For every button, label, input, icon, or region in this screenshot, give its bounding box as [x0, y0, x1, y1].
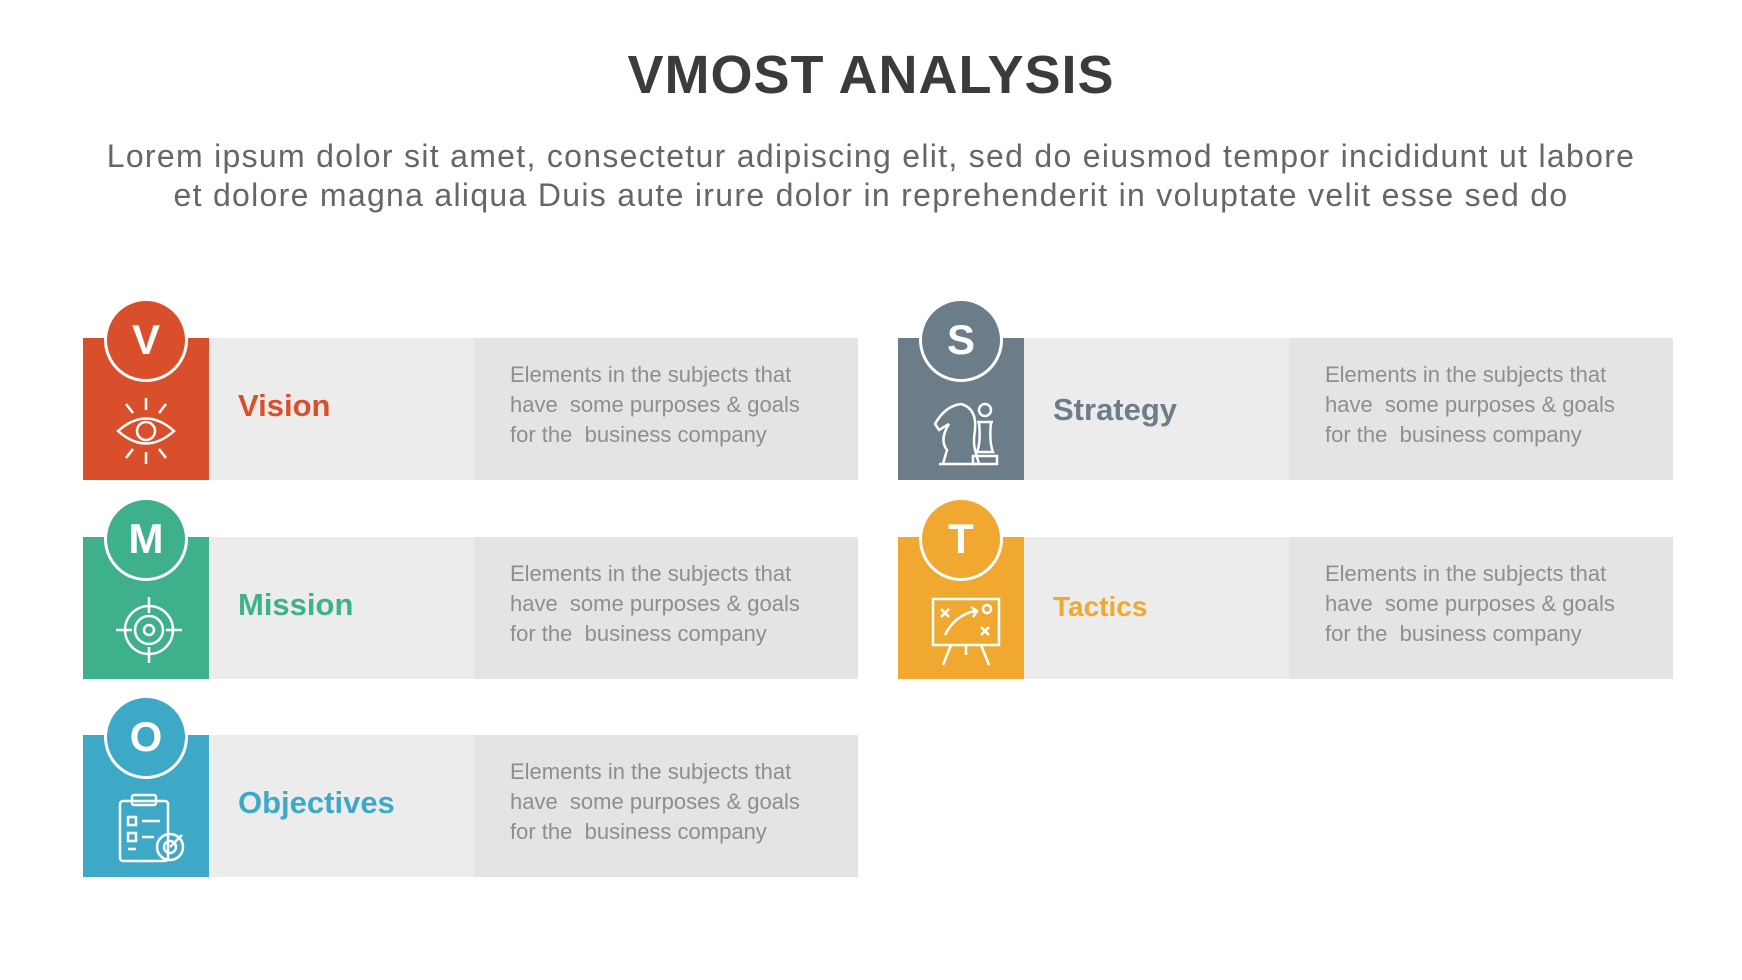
circle O: O — [130, 713, 162, 760]
circle V: V — [132, 316, 160, 363]
icon: chess pieces — [934, 402, 998, 466]
panel: strategy — [898, 338, 1673, 480]
subtitle: Lorem ipsum dolor sit amet, consectetur adipiscing elit, sed do eiusmod tempor incididunt ut labore — [107, 138, 1635, 174]
circle S — [919, 298, 1003, 382]
label: Tactics — [1053, 591, 1147, 622]
title: VMOST ANALYSIS — [627, 45, 1115, 105]
description: have some purposes & goals — [510, 789, 800, 814]
description: have some purposes & goals — [1325, 392, 1615, 417]
panel: tactics — [898, 537, 1673, 679]
description — [510, 362, 800, 447]
circle T — [919, 497, 1003, 581]
circle M — [104, 497, 188, 581]
label: Mission — [238, 587, 353, 622]
circle M: M — [128, 515, 164, 562]
label: Vision — [238, 388, 330, 423]
description: have some purposes & goals — [1325, 591, 1615, 616]
description: Elements in the subjects that — [510, 362, 791, 387]
circle T: T — [948, 515, 974, 562]
description: Elements in the subjects that — [510, 561, 791, 586]
icon: board — [932, 598, 1000, 666]
circle O — [104, 695, 188, 779]
subtitle — [107, 138, 1635, 213]
description: for the business company — [510, 819, 767, 844]
description — [1325, 362, 1615, 447]
description — [510, 759, 800, 844]
label: Strategy — [1053, 392, 1177, 427]
panel: objectives — [83, 735, 858, 877]
description: Elements in the subjects that — [510, 759, 791, 784]
description — [1325, 561, 1615, 646]
panel: vision — [83, 338, 858, 480]
description: have some purposes & goals — [510, 591, 800, 616]
description — [510, 561, 800, 646]
panel: mission — [83, 537, 858, 679]
description: for the business company — [510, 621, 767, 646]
description: for the business company — [1325, 621, 1582, 646]
description: have some purposes & goals — [510, 392, 800, 417]
icon: eye — [116, 398, 176, 464]
circle S: S — [947, 316, 975, 363]
circle V — [104, 298, 188, 382]
icon: clipboard — [118, 794, 184, 862]
subtitle: et dolore magna aliqua Duis aute irure dolor in reprehenderit in voluptate velit esse sed do — [173, 177, 1569, 213]
description: Elements in the subjects that — [1325, 362, 1606, 387]
description: for the business company — [1325, 422, 1582, 447]
description: for the business company — [510, 422, 767, 447]
description: Elements in the subjects that — [1325, 561, 1606, 586]
label: Objectives — [238, 785, 395, 820]
icon: target — [116, 597, 182, 663]
